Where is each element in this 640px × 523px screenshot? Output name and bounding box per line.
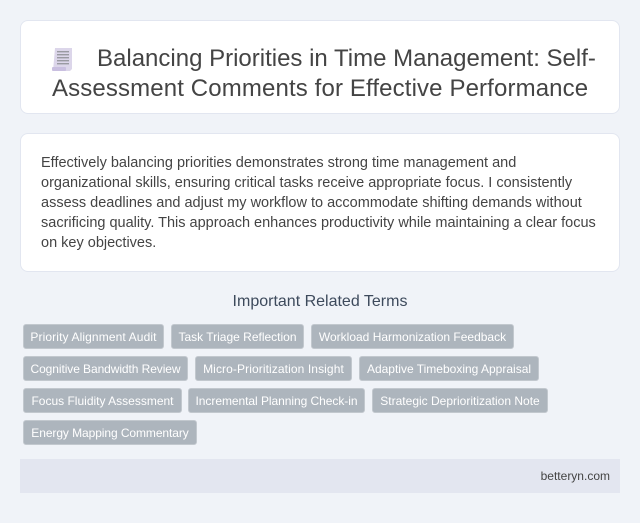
tag: Strategic Deprioritization Note <box>380 394 540 408</box>
footer text: betteryn.com <box>541 469 610 483</box>
tag <box>23 356 188 381</box>
tag <box>23 420 197 445</box>
tag: Priority Alignment Audit <box>30 330 157 344</box>
description text <box>41 155 596 251</box>
icon: document <box>52 48 72 71</box>
related terms heading: Important Related Terms <box>233 293 407 310</box>
tags <box>23 324 548 445</box>
tag <box>311 324 514 349</box>
description text: assess deadlines and adjust my workflow to accommodate shifting demands without <box>41 195 582 211</box>
tag: Energy Mapping Commentary <box>31 426 189 440</box>
description text: on key objectives. <box>41 235 156 251</box>
tag <box>23 324 164 349</box>
tag <box>171 324 304 349</box>
tag: Task Triage Reflection <box>178 330 297 344</box>
description text: organizational skills, ensuring critical tasks receive appropriate focus. I consistently <box>41 175 572 191</box>
footer bar <box>20 459 620 493</box>
tag: Adaptive Timeboxing Appraisal <box>367 362 531 376</box>
description text: sacrificing quality. This approach enhances productivity while maintaining a clear focus <box>41 215 596 231</box>
title: Assessment Comments for Effective Performance <box>52 75 588 102</box>
tag <box>372 388 548 413</box>
description text: Effectively balancing priorities demonstrates strong time management and <box>41 155 516 171</box>
tag <box>188 388 365 413</box>
description panel <box>20 133 620 272</box>
tag <box>195 356 352 381</box>
header panel <box>20 20 620 114</box>
tag: Cognitive Bandwidth Review <box>30 362 180 376</box>
tag: Focus Fluidity Assessment <box>31 394 174 408</box>
tag <box>23 388 182 413</box>
tag: Micro-Prioritization Insight <box>203 362 344 376</box>
tag: Incremental Planning Check-in <box>196 394 357 408</box>
tag <box>359 356 539 381</box>
title: Balancing Priorities in Time Management: Self- <box>97 45 596 72</box>
tag: Workload Harmonization Feedback <box>319 330 506 344</box>
title <box>52 45 596 102</box>
